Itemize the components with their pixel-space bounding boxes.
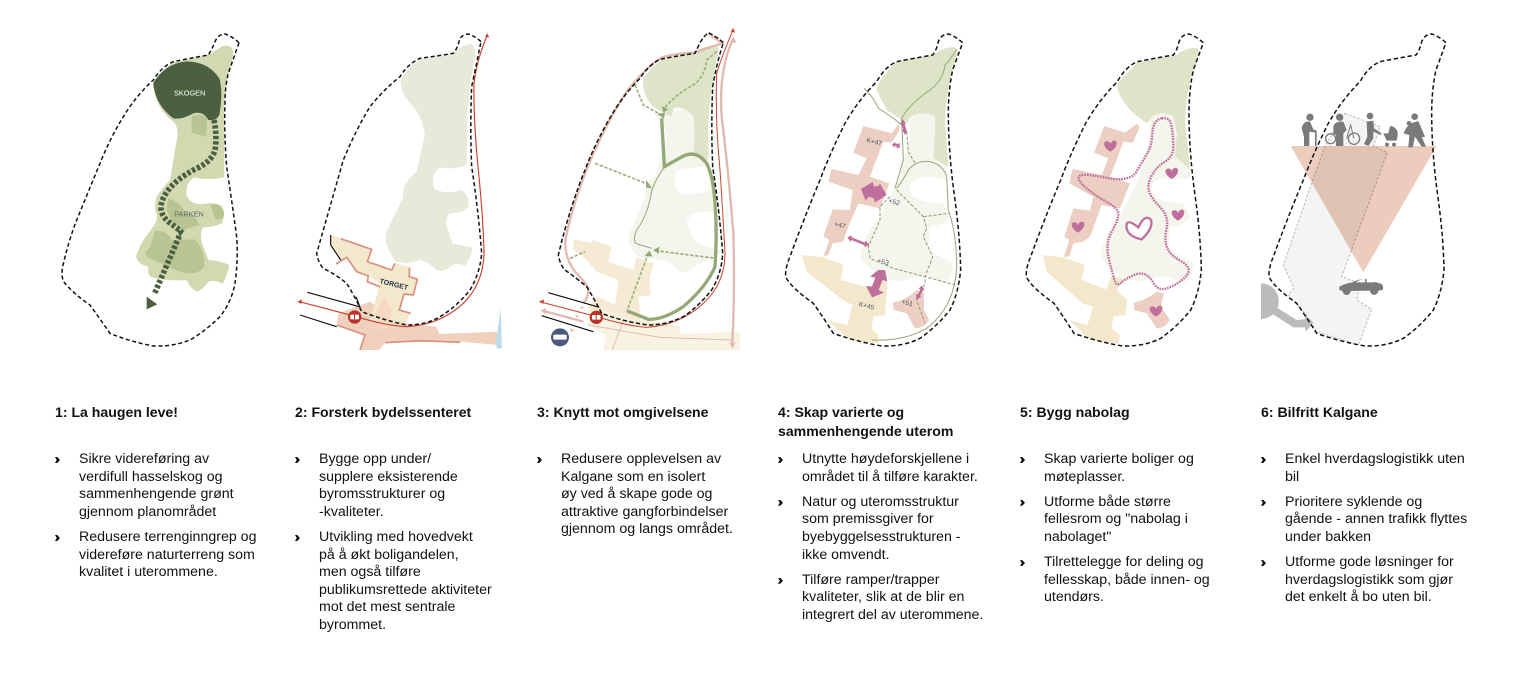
bullet list 1: sammenhengende grønt — [79, 486, 234, 502]
label: parken: PARKEN — [174, 210, 204, 219]
green hill area — [136, 46, 233, 292]
level labels: +51 — [901, 299, 914, 308]
icon: family — [1403, 113, 1426, 147]
bullet list 2: men også tilføre — [319, 564, 421, 580]
green paths — [864, 49, 957, 340]
bullet list 1: gjennom planområdet — [79, 504, 216, 520]
text column 6 — [1261, 404, 1467, 605]
beige building block — [802, 255, 887, 343]
icon: large heart outline — [1126, 218, 1151, 239]
bullet list 5: fellesrom og "nabolag i — [1044, 511, 1188, 527]
heading 6: 6: Bilfritt Kalgane — [1261, 404, 1378, 420]
dotted neighbourhood boundary — [1079, 118, 1189, 289]
text column 3 — [537, 404, 733, 537]
site boundary — [786, 34, 963, 346]
bullet list 6: under bakken — [1285, 529, 1371, 545]
bullet list 2: publikumsrettede aktiviteter — [319, 582, 492, 598]
bullet list 1: Redusere terrenginngrep og — [79, 529, 256, 545]
icon: person with bicycle — [1326, 114, 1360, 146]
building area — [331, 235, 417, 324]
black roads — [300, 235, 360, 327]
bullet list 4: Utnytte høydeforskjellene i — [802, 451, 969, 467]
forest tint — [643, 45, 719, 160]
level labels: +53 — [877, 258, 890, 267]
white clearings — [675, 167, 720, 250]
bullet list 2 — [295, 451, 492, 633]
bullet list 4: Tilføre ramper/trapper — [802, 572, 939, 588]
bullet list 3 — [537, 451, 733, 537]
text column 5 — [1020, 404, 1210, 605]
bullet list 5: Utforme både større — [1044, 494, 1171, 510]
underground garage area — [1283, 113, 1387, 345]
pale hill area — [859, 113, 953, 283]
dashed paths — [868, 132, 955, 323]
building and road tint — [573, 239, 740, 350]
bullet list 2: mot det mest sentrale — [319, 599, 455, 615]
icon: bus stop — [551, 328, 569, 346]
level arrows — [847, 119, 925, 300]
bullet list 4: området til å tilføre karakter. — [802, 469, 978, 485]
bullet list 5: fellesskap, både innen- og — [1044, 572, 1210, 588]
red route arrow — [299, 35, 487, 327]
bullet list 1: kvalitet i uterommene. — [79, 564, 218, 580]
panel: map 3 knytt mot omgivelsene — [539, 28, 740, 350]
pink building blocks — [1064, 124, 1139, 257]
bullet list 5: møteplasser. — [1044, 469, 1125, 485]
icon: train stop — [590, 311, 603, 324]
level labels: +52 — [888, 198, 901, 207]
text column 4 — [778, 404, 983, 623]
pale hill area — [628, 107, 720, 272]
bullet list 5: Tilrettelegge for deling og — [1044, 554, 1204, 570]
bullet list 5: nabolaget" — [1044, 529, 1111, 545]
panel: map 6 bilfritt kalgane — [1261, 34, 1446, 346]
heading 3: 3: Knytt mot omgivelsene — [537, 404, 709, 420]
red route — [539, 29, 733, 327]
building edges — [336, 239, 460, 350]
water edge — [496, 308, 502, 348]
heading 4 — [778, 404, 953, 439]
pink walking routes — [543, 33, 734, 345]
inverted triangle — [1291, 146, 1437, 272]
bullet list 5: Skap varierte boliger og — [1044, 451, 1194, 467]
bullet list 6: Utforme gode løsninger for — [1285, 554, 1454, 570]
beige building block — [1043, 255, 1127, 344]
main green path — [627, 118, 716, 319]
bullet list 4: Natur og uteromsstruktur — [802, 494, 959, 510]
forest area — [153, 61, 221, 120]
bullet list 4: byebyggelsesstrukturen - — [802, 529, 961, 545]
bullet list 2: byromsstrukturer og — [319, 486, 445, 502]
panel: map 2 forsterk bydelssenteret — [297, 33, 502, 350]
bullet list 4: ikke omvendt. — [802, 547, 890, 563]
heading 1: 1: La haugen leve! — [55, 404, 178, 420]
icon: person with pram — [1364, 113, 1398, 147]
bullet list 6 — [1261, 451, 1467, 605]
panel: map 4 skap varierte uterom — [786, 34, 963, 346]
pale hill area — [386, 44, 475, 271]
bullet list 3: Redusere opplevelsen av — [561, 451, 721, 467]
bullet list 4 — [778, 451, 983, 623]
hearts — [1072, 141, 1184, 317]
level labels: K+47 — [866, 137, 883, 148]
forest tint — [1118, 48, 1198, 170]
bullet list 1: verdifull hasselskog og — [79, 469, 223, 485]
panel: map 5 bygg nabolag — [1026, 34, 1203, 346]
darker park patches — [145, 115, 224, 273]
bullet list 5 — [1020, 451, 1210, 605]
site boundary — [317, 34, 482, 325]
pink building blocks — [823, 124, 900, 257]
site boundary — [558, 33, 723, 325]
icon: train stop — [348, 310, 361, 324]
icon: car — [1339, 279, 1383, 295]
bullet list 3: Kalgane som en isolert — [561, 469, 705, 485]
bullet list 6: det enkelt å bo uten bil. — [1285, 589, 1432, 605]
bullet list 6: Enkel hverdagslogistikk uten — [1285, 451, 1465, 467]
bullet list 3: attraktive gangforbindelser — [561, 504, 728, 520]
bullet list 1: videreføre naturterreng som — [79, 547, 255, 563]
bullet list 5: utendørs. — [1044, 589, 1104, 605]
forest tint — [877, 47, 958, 167]
bullet list 6: hverdagslogistikk som gjør — [1285, 572, 1453, 588]
bullet list 2: -kvaliteter. — [319, 504, 384, 520]
site boundary — [1269, 34, 1446, 346]
site boundary — [62, 34, 239, 346]
bullet list 4: integrert del av uterommene. — [802, 607, 983, 623]
dashed green arrow — [147, 120, 216, 309]
pale hill area — [1101, 113, 1194, 283]
bullet list 2: supplere eksisterende — [319, 469, 458, 485]
label: skogen: SKOGEN — [174, 89, 205, 98]
heading 5: 5: Bygg nabolag — [1020, 404, 1130, 420]
bullet list 2: byrommet. — [319, 617, 386, 633]
black roads — [542, 293, 599, 332]
bullet list 3: gjennom og langs området. — [561, 521, 733, 537]
bullet list 1 — [55, 451, 256, 580]
bullet list 4: kvaliteter, slik at de blir en — [802, 589, 964, 605]
label: torget: TORGET — [379, 278, 409, 292]
bullet list 1: Sikre videreføring av — [79, 451, 209, 467]
text column 1 — [55, 404, 256, 580]
level labels: K+45 — [858, 301, 875, 312]
bullet list 3: øy ved å skape gode og — [561, 486, 712, 502]
bullet list 2: på å økt boligandelen, — [319, 547, 459, 563]
pink route heads — [541, 37, 737, 348]
icon: person with walker — [1302, 114, 1317, 146]
bullet list 6: gående - annen trafikk flyttes — [1285, 511, 1467, 527]
bullet list 2: Utvikling med hovedvekt — [319, 529, 473, 545]
icon: people — [1302, 113, 1426, 147]
arrow into square — [375, 297, 392, 330]
text column 2 — [295, 404, 492, 633]
road network — [337, 302, 498, 350]
level labels: +47 — [833, 221, 846, 231]
heading 4: sammenhengende uterom — [778, 423, 953, 439]
site boundary — [1026, 34, 1203, 346]
panel: map 1 la haugen leve — [62, 34, 239, 346]
level labels — [833, 137, 914, 312]
bullet list 6: bil — [1285, 469, 1299, 485]
heading 4: 4: Skap varierte og — [778, 404, 904, 420]
heading 2: 2: Forsterk bydelssenteret — [295, 404, 471, 420]
grey access road — [1261, 283, 1313, 332]
bullet list 6: Prioritere syklende og — [1285, 494, 1422, 510]
bullet list 2: Bygge opp under/ — [319, 451, 431, 467]
dashed green connections — [570, 52, 717, 312]
bullet list 4: som premissgiver for — [802, 511, 934, 527]
